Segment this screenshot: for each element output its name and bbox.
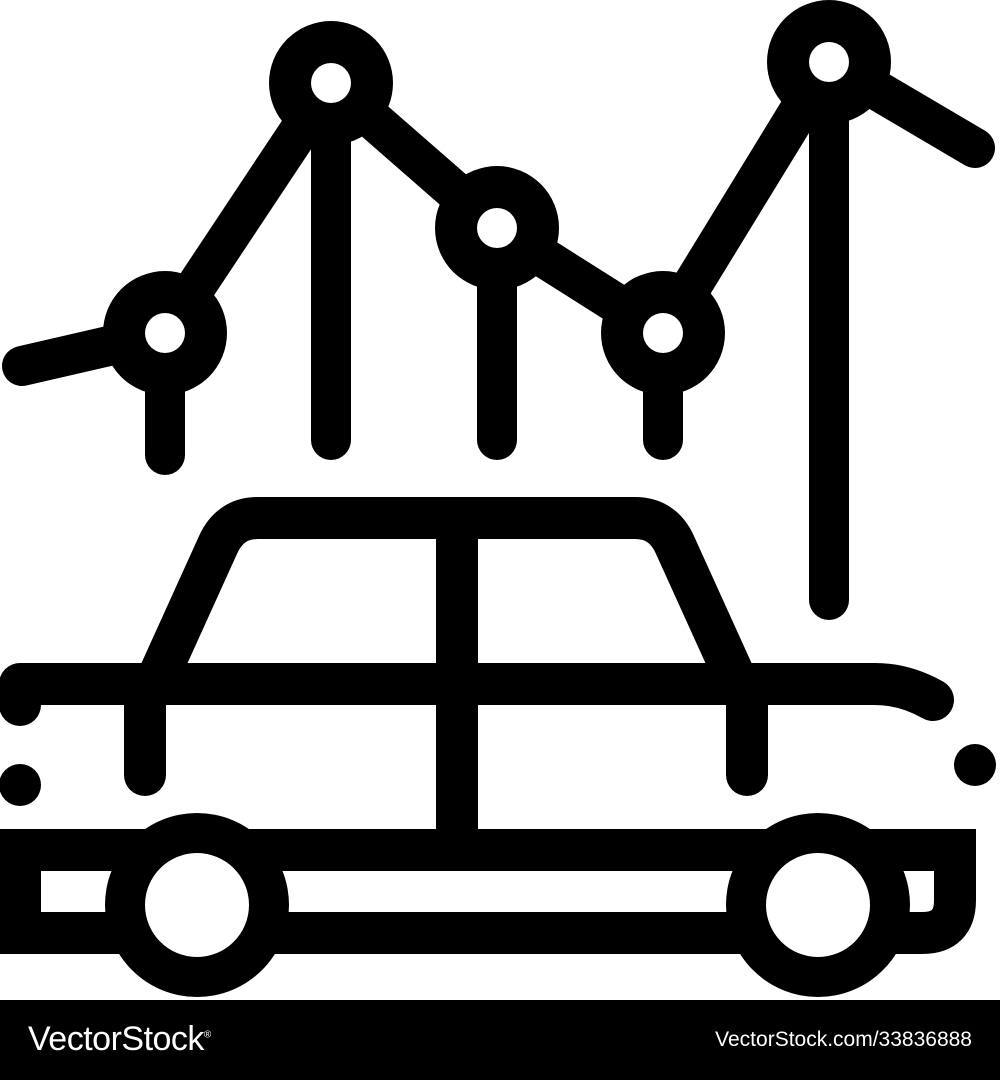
watermark bar: VectorStock® — [28, 1020, 211, 1058]
watermark bar — [0, 1000, 1000, 1080]
watermark bar: VectorStock.com/33836888 — [715, 1028, 972, 1051]
car — [20, 518, 955, 933]
dots — [0, 744, 996, 806]
line chart — [22, 0, 975, 600]
wheels — [105, 813, 910, 997]
